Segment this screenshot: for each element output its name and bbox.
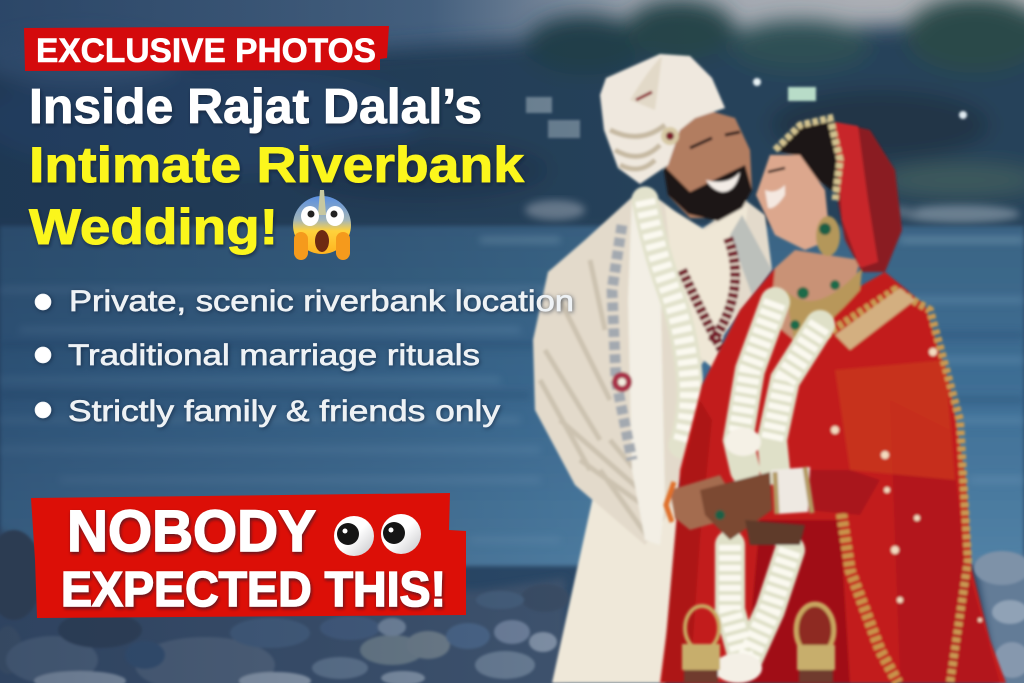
bullet list <box>35 285 574 428</box>
garland strands upper <box>738 302 820 470</box>
groom: smile <box>706 172 740 192</box>
background: river water <box>0 226 1024 566</box>
bride: maang tikka jewelry <box>775 118 840 200</box>
bride: head covering <box>832 122 902 272</box>
groom <box>533 54 772 683</box>
bridal garlands and hands <box>666 302 835 683</box>
groom: red bead necklaces <box>682 238 735 350</box>
bride hand with mehndi <box>700 472 772 540</box>
groom hand <box>670 475 735 530</box>
banner: nobody expected this <box>31 493 466 618</box>
title: Intimate Riverbank <box>29 137 524 193</box>
groom: turban <box>600 54 725 184</box>
groom: kurta chest <box>665 205 748 370</box>
left side dark overlay <box>0 0 700 683</box>
garland strands lower <box>730 545 790 665</box>
groom: jacket collar band <box>730 215 772 295</box>
groom: beard <box>663 165 752 221</box>
bride: gold stars <box>831 348 982 622</box>
title <box>29 80 524 255</box>
bride: hair <box>775 122 838 195</box>
icon: eyes <box>334 514 421 556</box>
bride: red lehenga and dupatta <box>660 268 1006 683</box>
bride: chest skin and necklace <box>770 250 860 345</box>
kaleere left <box>682 606 720 683</box>
bride <box>660 118 1006 683</box>
title: Wedding! <box>29 199 278 255</box>
groom: long kurta lower <box>552 400 690 683</box>
bullet 3: Strictly family & friends only <box>68 395 500 428</box>
groom: sherwani jacket <box>533 190 772 545</box>
groom: stole with mirrors <box>628 195 665 545</box>
bride: red sleeve <box>806 470 880 515</box>
icon: shocked face emoji <box>293 190 351 260</box>
bride: earring <box>816 216 840 256</box>
groom: jasmine garland <box>645 200 690 445</box>
bride: gold dupatta borders <box>825 290 968 683</box>
orange bangle <box>666 482 674 522</box>
banner: nobody expected this: NOBODY <box>67 499 316 564</box>
bride bangles <box>771 467 810 514</box>
bride: face <box>756 155 830 250</box>
badge: exclusive photos: EXCLUSIVE PHOTOS <box>36 32 376 70</box>
background: riverbank rocks <box>0 520 1024 683</box>
bullet 2: Traditional marriage rituals <box>68 339 480 372</box>
kaleere right <box>796 604 835 683</box>
banner: nobody expected this: EXPECTED THIS! <box>61 563 446 617</box>
groom: neck and face <box>665 105 752 218</box>
bullet 1: Private, scenic riverbank location <box>69 285 574 318</box>
background: sky and hills <box>0 0 1024 240</box>
title: Inside Rajat Dalal’s <box>29 80 482 134</box>
